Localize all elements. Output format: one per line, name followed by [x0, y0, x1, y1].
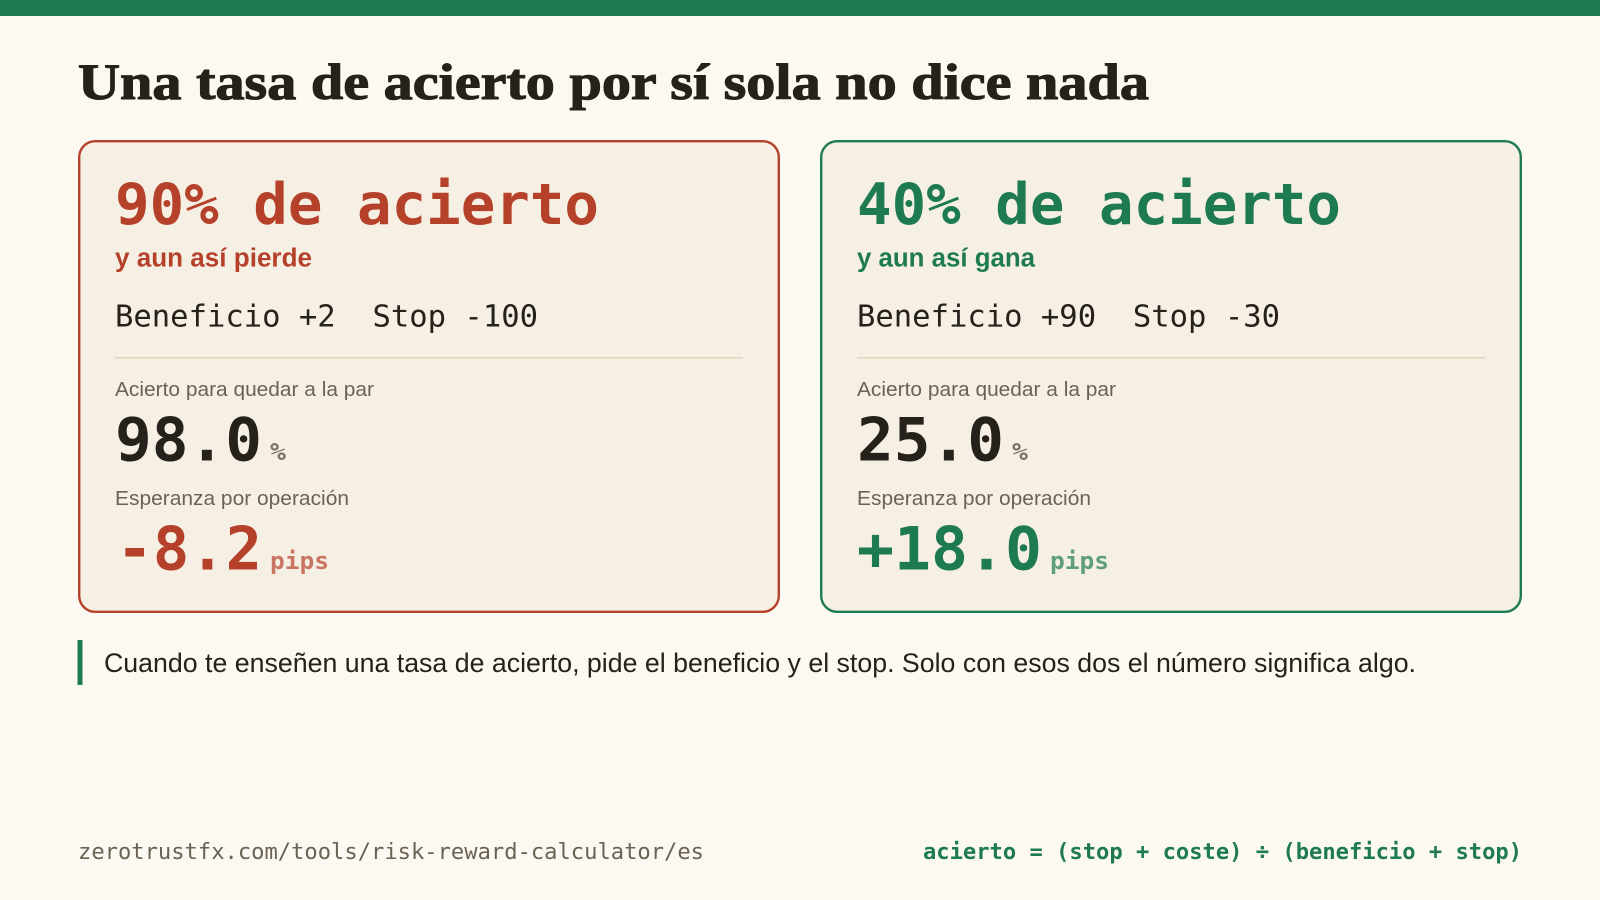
value: -8.2 pips — [116, 514, 329, 584]
panel subheading: loses: y aun así pierde — [115, 244, 312, 272]
value: +18.0 pips: pips — [1050, 547, 1109, 575]
title: Una tasa de acierto por sí sola no dice nada — [78, 55, 1149, 111]
footer url: zerotrustfx.com/tools/risk-reward-calculator/es — [78, 840, 704, 865]
callout: Cuando te enseñen una tasa de acierto, pide el beneficio y el stop. Solo con esos dos el número significa algo. — [104, 648, 1416, 678]
panel: 90% win rate loses — [79, 141, 779, 612]
panel subheading: wins: y aun así gana — [857, 244, 1036, 272]
value: 98.0%: % — [270, 438, 287, 466]
panel heading: 40%: 40% de acierto — [857, 172, 1341, 238]
label: expectancy per trade: Esperanza por operación — [857, 488, 1091, 510]
value: 98.0%: 98.0 — [115, 406, 262, 476]
callout — [78, 640, 1416, 685]
value: 25.0%: 25.0 — [857, 406, 1004, 476]
value: 25.0%: % — [1012, 438, 1029, 466]
value: -8.2 pips: -8.2 — [116, 514, 262, 584]
profit and stop values: Beneficio +2 Stop -100 — [115, 300, 538, 334]
panel heading: 90%: 90% de acierto — [115, 172, 599, 238]
profit and stop values: Beneficio +90 Stop -30 — [857, 300, 1280, 334]
label: expectancy per trade: Esperanza por operación — [115, 488, 349, 510]
value: -8.2 pips: pips — [270, 547, 329, 575]
label: break-even win rate: Acierto para quedar a la par — [115, 379, 374, 401]
top accent bar — [0, 0, 1600, 16]
value: +18.0 pips: +18.0 — [857, 514, 1042, 584]
label: break-even win rate: Acierto para quedar a la par — [857, 379, 1116, 401]
panel: 40% win rate wins — [821, 141, 1521, 612]
footer formula: acierto = (stop + coste) ÷ (beneficio + stop) — [923, 840, 1522, 865]
